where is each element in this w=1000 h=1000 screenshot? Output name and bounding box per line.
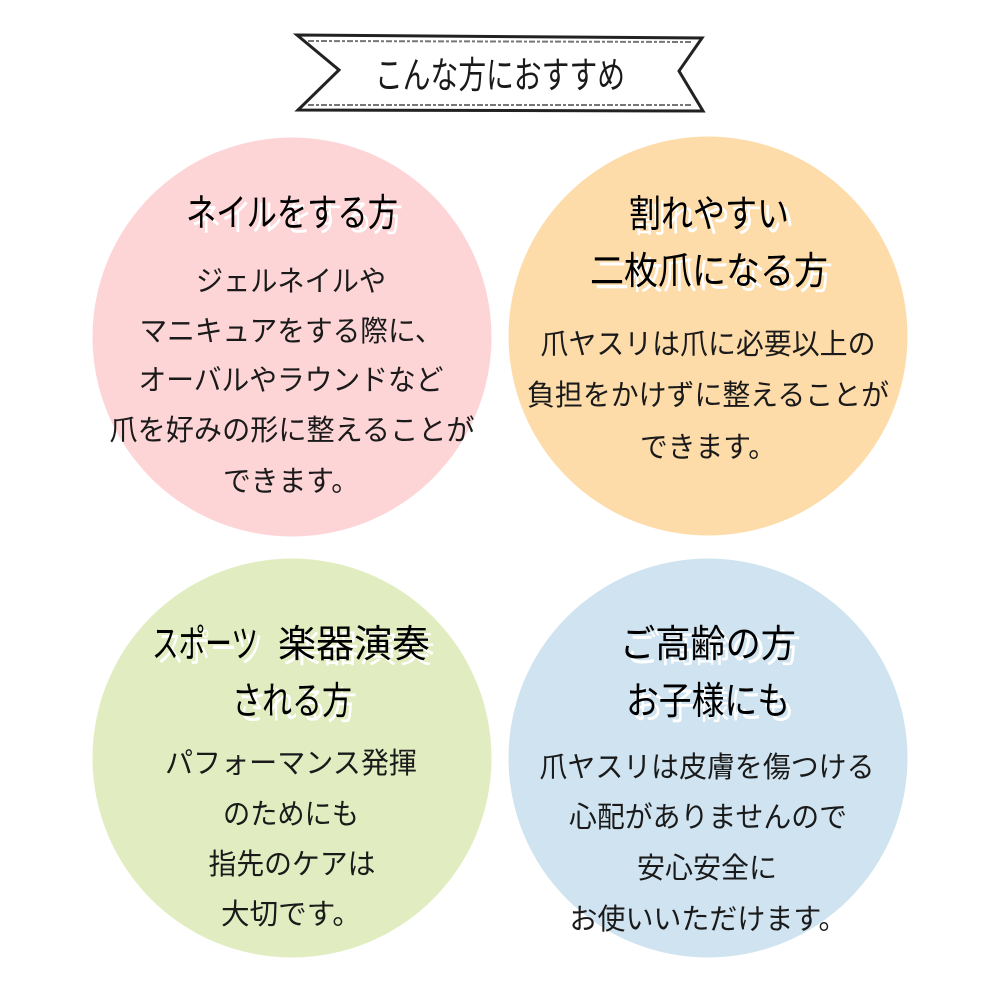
text block: brittle nails: 爪ヤスリは爪に必要以上の (540, 328, 876, 361)
text block: sports and music: 大切です。 (221, 898, 361, 931)
heading: nail users: ネイルをする方 (191, 198, 403, 240)
text block: nail users: 爪を好みの形に整えることが (110, 414, 474, 447)
heading: brittle nails: 二枚爪になる方 (595, 256, 833, 298)
heading: brittle nails (590, 194, 833, 298)
text block: nail users (110, 266, 474, 498)
heading: sports and music: される方 (237, 686, 357, 728)
text block: nail users: マニキュアをする際に、 (140, 315, 442, 348)
heading: sports and music (152, 624, 435, 728)
heading: seniors and children: お子様にも (631, 686, 795, 728)
text block: brittle nails: 負担をかけずに整えることが (527, 379, 889, 412)
text block: seniors and children (540, 751, 874, 936)
text block: seniors and children: お使いいただけます。 (570, 903, 846, 936)
heading: sports and music: 楽器演奏 (278, 624, 430, 666)
panel: brittle nails (508, 136, 908, 536)
text block: nail users: ジェルネイルや (196, 266, 386, 298)
heading: brittle nails: 割れやすい (629, 194, 789, 236)
heading: seniors and children: ご高齢の方 (620, 624, 796, 666)
text block: sports and music (165, 747, 417, 931)
panel: nail users (92, 138, 492, 536)
heading: sports and music: スポーツ (157, 629, 263, 671)
ribbon banner title (297, 35, 703, 111)
heading: seniors and children (620, 624, 801, 728)
text block: nail users: できます。 (223, 466, 359, 498)
heading: brittle nails: 二枚爪になる方 (590, 251, 828, 293)
heading: seniors and children: お子様にも (626, 681, 790, 723)
text block: brittle nails (527, 328, 889, 464)
text block: sports and music: のためにも (223, 799, 359, 831)
text block: nail users: オーバルやラウンドなど (138, 365, 444, 397)
heading: sports and music: される方 (232, 681, 352, 723)
text block: brittle nails: できます。 (640, 432, 776, 464)
ribbon banner title: こんな方におすすめ (375, 55, 625, 96)
heading: sports and music: 楽器演奏 (283, 629, 435, 671)
panel: seniors and children (508, 558, 908, 958)
heading: sports and music: スポーツ (152, 624, 258, 666)
panel: sports and music (92, 558, 492, 958)
text block: sports and music: パフォーマンス発揮 (165, 747, 417, 780)
text block: sports and music: 指先のケアは (208, 848, 376, 881)
heading: nail users: ネイルをする方 (186, 193, 398, 235)
text block: seniors and children: 安心安全に (637, 852, 777, 885)
heading: brittle nails: 割れやすい (634, 199, 794, 241)
text block: seniors and children: 心配がありませんので (569, 801, 847, 834)
heading: seniors and children: ご高齢の方 (625, 629, 801, 671)
text block: seniors and children: 爪ヤスリは皮膚を傷つける (540, 751, 874, 784)
